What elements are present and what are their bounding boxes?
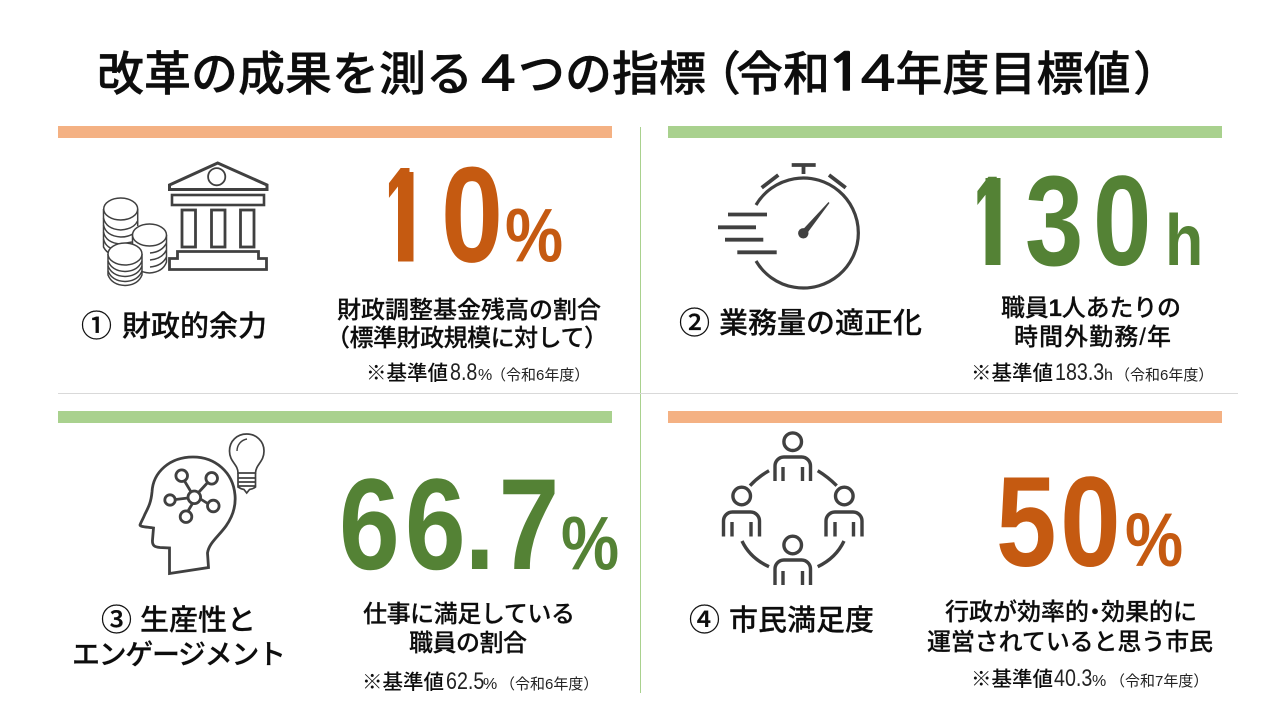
heading: citizen satisfaction: 市民満足度: [729, 604, 874, 637]
title: 年度目標値: [896, 48, 1130, 100]
baseline note: （令和6年度）: [1115, 367, 1213, 384]
baseline note: [366, 358, 589, 385]
baseline note: %: [1092, 673, 1106, 690]
heading: productivity and engagement: エンゲージメント: [72, 639, 286, 670]
panel: productivity and engagement: [58, 411, 619, 694]
description: fund ratio: （標準財政規模に対して）: [326, 325, 608, 352]
icon: bank and coins: [104, 163, 267, 286]
figure: 50%: [996, 451, 1183, 594]
heading: fiscal capacity: ①: [81, 309, 112, 344]
figure: 130h: [961, 149, 1203, 293]
description: fund ratio: [326, 297, 608, 352]
figure: 66.7%: 66.7: [339, 452, 559, 597]
title: 改革の成果を測る: [97, 48, 473, 100]
panel bar: orange: [58, 126, 612, 138]
figure: 50%: %: [1125, 498, 1183, 583]
title: （令和: [694, 48, 830, 100]
figure: 10%: 1: [384, 139, 422, 291]
baseline note: （令和7年度）: [1110, 673, 1208, 690]
figure: 130h: h: [1165, 201, 1203, 281]
heading: fiscal capacity: 財政的余力: [122, 310, 267, 343]
baseline note: ※基準値: [971, 668, 1053, 691]
baseline note: 8.8: [450, 358, 477, 385]
description: efficient administration: [927, 599, 1213, 656]
baseline note: ※基準値: [366, 362, 448, 385]
description: satisfied staff: [363, 601, 575, 657]
baseline note: %: [478, 367, 492, 384]
description: satisfied staff: 仕事に満足している: [363, 601, 575, 628]
description: overtime: 時間外勤務/年: [1014, 324, 1171, 351]
heading: workload: 業務量の適正化: [719, 307, 922, 340]
baseline note: 62.5: [446, 667, 484, 694]
baseline note: ※基準値: [971, 362, 1053, 385]
figure: 130h: 30: [1025, 149, 1151, 292]
panel: citizen satisfaction: [668, 411, 1222, 691]
figure: 10%: %: [505, 194, 563, 279]
figure: 50%: 50: [996, 451, 1121, 594]
baseline note: ※基準値: [362, 671, 444, 694]
description: efficient administration: 行政が効率的・効果的に: [945, 599, 1197, 626]
baseline note: h: [1104, 367, 1113, 384]
icon: people in a circle: [724, 433, 862, 585]
title: [97, 44, 1180, 102]
title: つの指標: [518, 48, 706, 100]
icon: stopwatch: [718, 165, 858, 288]
panel: workload: [668, 126, 1222, 385]
heading: productivity and engagement: [72, 603, 286, 670]
figure: 10%: 0: [441, 139, 503, 291]
description: fund ratio: 財政調整基金残高の割合: [337, 297, 601, 324]
figure: 10%: [372, 139, 563, 291]
description: efficient administration: 運営されていると思う市民: [927, 629, 1213, 656]
panel bar: green: [58, 411, 612, 423]
panel: fiscal capacity: [58, 126, 612, 385]
heading: productivity and engagement: ③: [101, 603, 132, 638]
baseline note: （令和6年度）: [500, 676, 598, 693]
title: 4: [481, 44, 516, 102]
baseline note: 183.3: [1055, 358, 1104, 385]
heading: workload: ②: [679, 306, 710, 341]
heading: citizen satisfaction: ④: [689, 603, 720, 638]
description: satisfied staff: 職員の割合: [409, 630, 527, 657]
panel bar: orange: [668, 411, 1222, 423]
title: 4: [861, 44, 895, 102]
title: 1: [826, 47, 864, 99]
baseline note: （令和6年度）: [491, 367, 589, 384]
panel bar: green: [668, 126, 1222, 138]
baseline note: [971, 664, 1208, 691]
figure: 130h: 1: [973, 150, 1009, 293]
baseline note: [971, 358, 1213, 385]
baseline note: [362, 667, 598, 694]
heading: productivity and engagement: 生産性と: [140, 604, 256, 637]
title: ）: [1133, 48, 1180, 100]
baseline note: %: [483, 676, 497, 693]
figure: 66.7%: %: [561, 502, 619, 587]
icon: head with network and light bulb: [140, 434, 264, 574]
description: overtime: 職員1人あたりの: [1001, 295, 1181, 322]
description: overtime: [1001, 295, 1181, 351]
baseline note: 40.3: [1054, 664, 1092, 691]
